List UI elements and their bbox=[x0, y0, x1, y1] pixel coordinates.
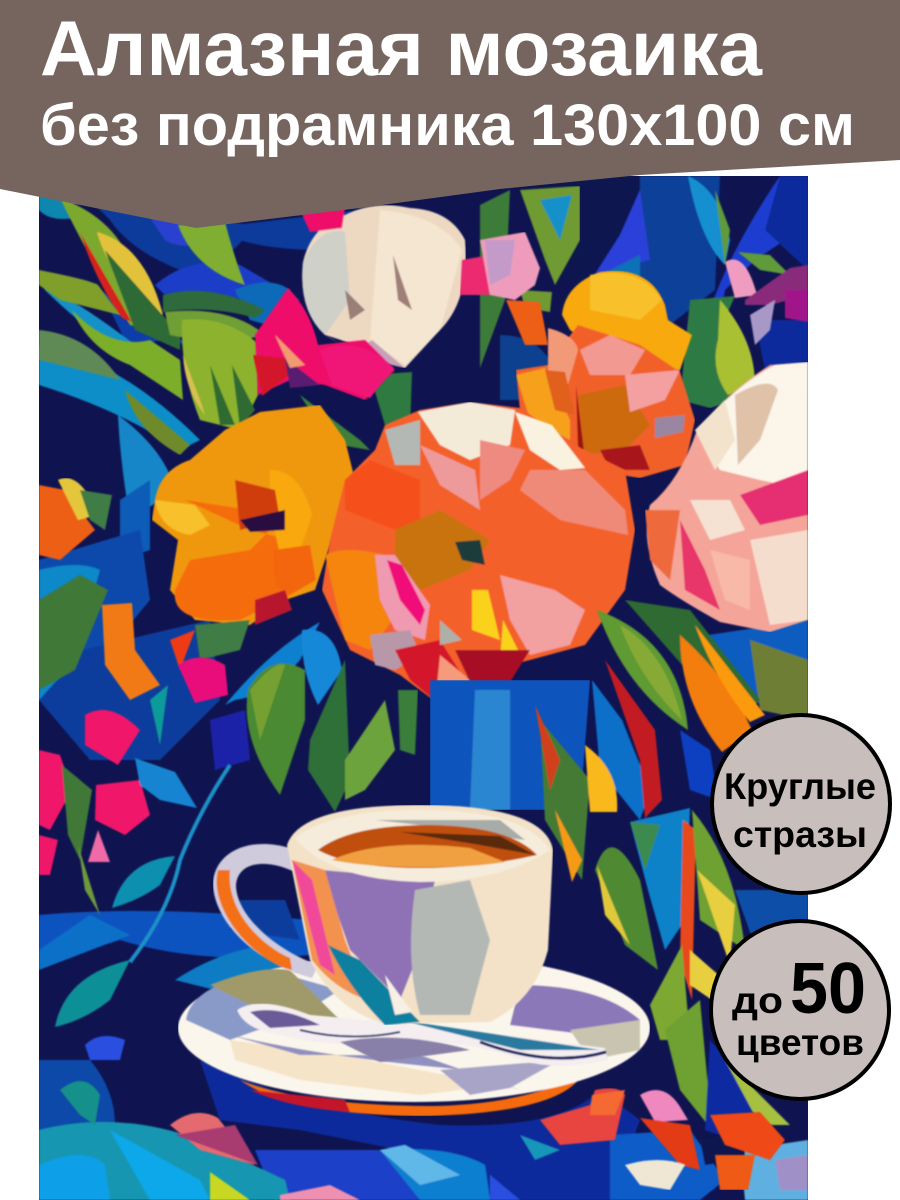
painting: flowers and coffee cup bbox=[39, 176, 808, 1200]
yellow and coral flower right bbox=[516, 271, 695, 478]
small flowers and stems left bbox=[39, 478, 360, 1200]
spoon bbox=[237, 1004, 608, 1066]
green leaves, upper left bbox=[39, 186, 580, 455]
badge: up to 50 colours bbox=[711, 921, 889, 1099]
petals bottom right bbox=[520, 1088, 785, 1190]
vase bbox=[430, 680, 590, 810]
badge: round rhinestones bbox=[712, 715, 890, 893]
central coral peony bbox=[322, 402, 635, 705]
orange flower left bbox=[152, 405, 355, 660]
white peony right bbox=[645, 362, 808, 632]
pink flower upper left bbox=[253, 288, 395, 400]
pink and lilac flowers upper right bbox=[460, 232, 808, 408]
leaves under bouquet bbox=[225, 622, 418, 812]
badge: round rhinestones: стразы bbox=[733, 814, 867, 855]
leaves lower right bbox=[535, 600, 808, 1140]
badge: up to 50 colours: цветов bbox=[736, 1022, 864, 1063]
badge: round rhinestones: Круглые bbox=[724, 766, 876, 807]
subtitle: без подрамника 130х100 см bbox=[40, 93, 855, 158]
badge: up to 50 colours: 50 bbox=[790, 949, 866, 1029]
badge: up to 50 colours: до bbox=[732, 980, 783, 1021]
background foliage: blue shapes bbox=[39, 176, 808, 1200]
saucer bbox=[178, 954, 650, 1116]
title: Алмазная мозаика bbox=[40, 4, 763, 92]
header banner bbox=[0, 0, 900, 228]
coffee cup bbox=[213, 805, 553, 1025]
white peony top bbox=[300, 205, 466, 368]
